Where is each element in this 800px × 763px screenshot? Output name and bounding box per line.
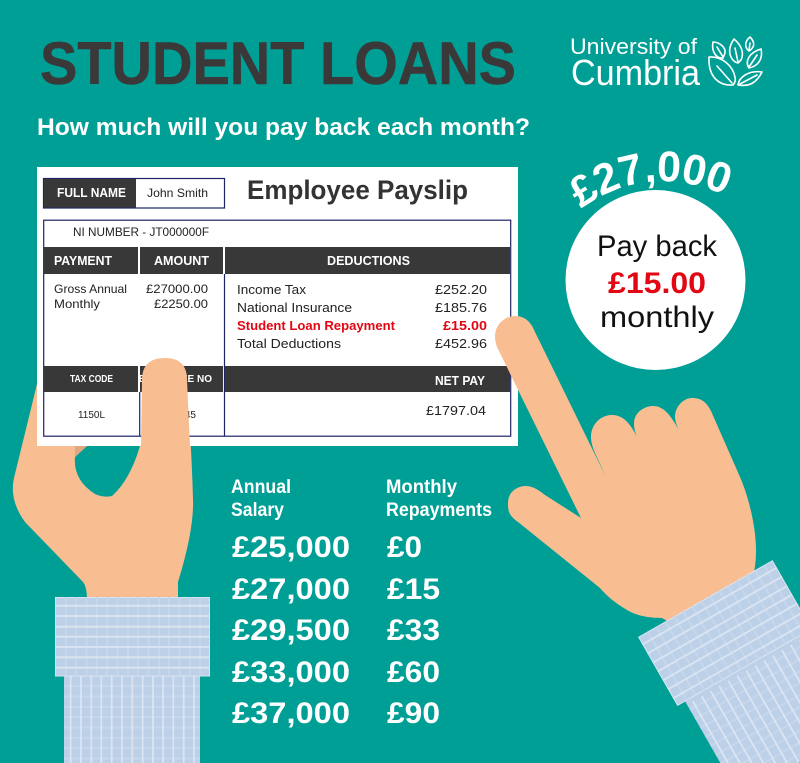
deductions list [237,282,487,351]
logo: University of Cumbria: Cumbria [571,52,701,93]
payment details: Monthly [54,297,100,311]
right hand pointing [495,316,756,640]
full name box [44,178,224,208]
lower header row [44,366,510,392]
deductions list: £185.76 [435,300,487,315]
lower row values: £1797.04 [426,404,486,418]
column heading: annual salary: Annual [231,477,291,498]
column heading: monthly repayments [386,477,492,521]
NI number: NI NUMBER - JT000000F [73,225,209,239]
deductions list: £452.96 [435,336,487,351]
subtitle: How much will you pay back each month? [37,114,530,141]
left sleeve [55,597,210,763]
salary values: £37,000 [232,697,350,730]
lower row values: 1150L [78,410,105,421]
callout: curved salary: £27,000 [571,151,730,208]
payslip heading: Employee Payslip [247,175,468,205]
right sleeve [638,560,800,763]
salary values: £33,000 [232,656,350,689]
payment details [54,282,208,311]
sleeve cuff [638,560,800,706]
salary values [232,531,350,730]
table header row: DEDUCTIONS [327,254,410,268]
payment details: £2250.00 [154,297,208,311]
payment details: Gross Annual [54,282,127,296]
repayment values: £33 [387,614,440,647]
deductions list: Student Loan Repayment [237,318,396,333]
column heading: monthly repayments: Repayments [386,500,492,521]
lower header row: NET PAY [435,374,486,388]
table frame [44,220,511,436]
payslip [37,167,518,446]
salary values: £29,500 [232,614,350,647]
salary values: £27,000 [232,573,350,606]
repayment values: £90 [387,697,440,730]
deductions list: National Insurance [237,300,352,315]
full name box: John Smith [147,186,208,200]
lower row values [78,404,486,421]
icon: finger shadow [75,446,87,457]
sleeve cuff [55,597,210,676]
column heading: annual salary: Salary [231,500,284,521]
title: STUDENT LOANS [40,30,516,97]
callout circle: £15.00 [608,267,706,300]
repayment values: £15 [387,573,440,606]
sleeve arm [64,676,200,763]
repayment values: £60 [387,656,440,689]
callout circle [566,190,746,370]
deductions list: Income Tax [237,282,307,297]
payslip paper [37,167,518,446]
lower header row: EMPLOYEE NO [139,374,212,385]
logo: University of Cumbria [570,34,762,93]
icon: leaves [709,37,762,85]
repayment table [231,477,492,730]
deductions list: Total Deductions [237,336,342,351]
logo: University of Cumbria: University of [570,34,698,59]
sleeve arm [685,634,800,763]
table header row: PAYMENT [54,254,112,268]
deductions list: £15.00 [443,318,487,333]
callout circle: monthly [600,301,714,334]
left hand: palm and fingers behind payslip [13,380,193,600]
lower header row: TAX CODE [70,374,113,385]
callout circle: Pay back [597,230,718,263]
table header row [44,247,510,274]
repayment values: £0 [387,531,422,564]
table header row: AMOUNT [154,254,209,268]
lower row values: 12345 [168,410,196,421]
salary values: £25,000 [232,531,350,564]
column heading: annual salary [231,477,291,521]
table dividers [140,274,224,436]
payment details: £27000.00 [146,282,208,296]
full name box: FULL NAME [57,186,126,200]
deductions list: £252.20 [435,282,487,297]
repayment values [387,531,440,730]
column heading: monthly repayments: Monthly [386,477,457,498]
left hand: thumb over payslip [136,358,191,470]
